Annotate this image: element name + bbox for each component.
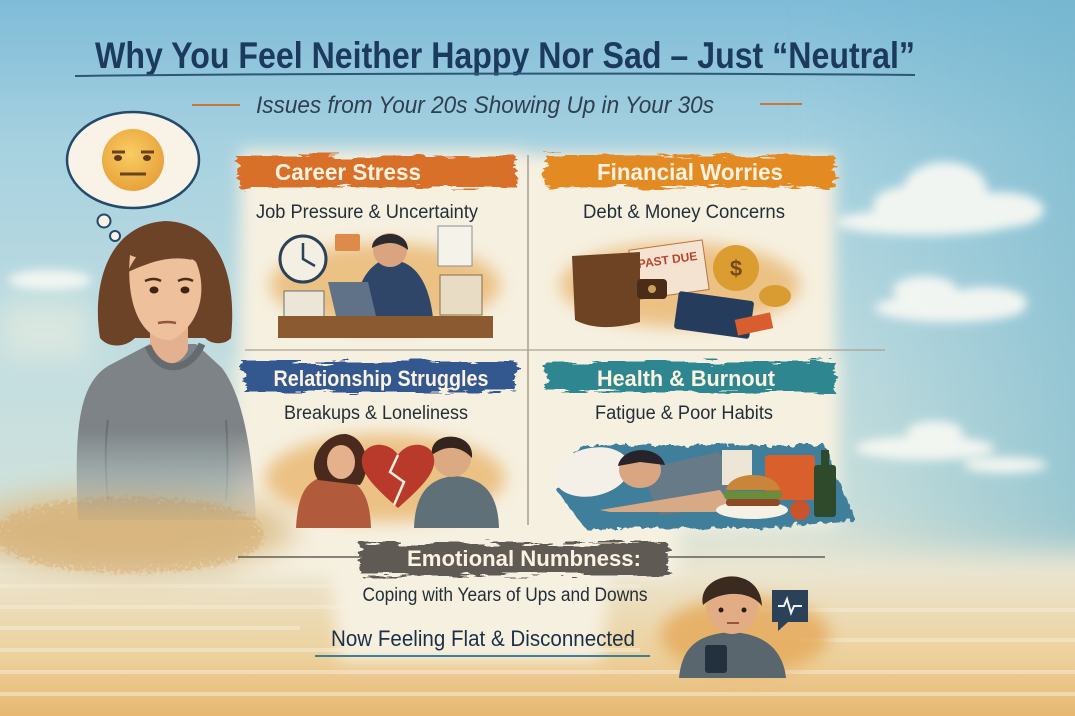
panel: financial worries xyxy=(546,155,835,339)
panel: relationship struggles xyxy=(243,362,517,528)
illustration: wallet, bill and coins xyxy=(560,240,800,339)
heading: career stress: Career Stress xyxy=(275,159,421,185)
heading: relationship struggles: Relationship Struggles xyxy=(274,366,488,391)
heading: health and burnout: Health & Burnout xyxy=(597,366,776,391)
illustration: wallet, bill and coins: $ xyxy=(730,256,742,281)
title: Why You Feel Neither Happy Nor Sad – Just “Neutral” xyxy=(95,35,915,76)
heading: financial worries: Financial Worries xyxy=(597,159,783,185)
subtitle: Issues from Your 20s Showing Up in Your 30s xyxy=(256,92,714,119)
panel: career stress xyxy=(238,156,516,338)
banner: emotional numbness: Emotional Numbness: xyxy=(407,546,641,571)
illustration: man looking at phone xyxy=(660,576,830,678)
text: now feeling flat: Now Feeling Flat & Disconnected xyxy=(331,626,635,651)
illustration: stressed worker at desk xyxy=(270,226,500,338)
cream central panel xyxy=(235,150,885,660)
text: fatigue and poor habits: Fatigue & Poor Habits xyxy=(595,403,773,424)
text: coping line: Coping with Years of Ups and Downs xyxy=(362,585,648,606)
text: debt and money: Debt & Money Concerns xyxy=(583,202,785,223)
banner: emotional numbness xyxy=(238,543,825,575)
clouds xyxy=(8,162,1047,473)
text: job pressure: Job Pressure & Uncertainty xyxy=(256,202,478,223)
panel: health and burnout xyxy=(546,362,855,528)
heading: financial worries xyxy=(546,155,835,187)
heading: career stress xyxy=(238,156,516,187)
illustration: couple and broken heart xyxy=(265,434,505,528)
heading: health and burnout xyxy=(546,362,835,392)
sand dissolve at the base xyxy=(0,488,295,572)
text: breakups and loneliness: Breakups & Loneliness xyxy=(284,403,468,424)
illustration: wallet, bill and coins: PAST DUE xyxy=(637,249,698,271)
illustration: sleeping person and junk food xyxy=(550,441,855,528)
woman in grey sweater xyxy=(0,221,295,572)
thought bubble with neutral face xyxy=(67,112,199,241)
